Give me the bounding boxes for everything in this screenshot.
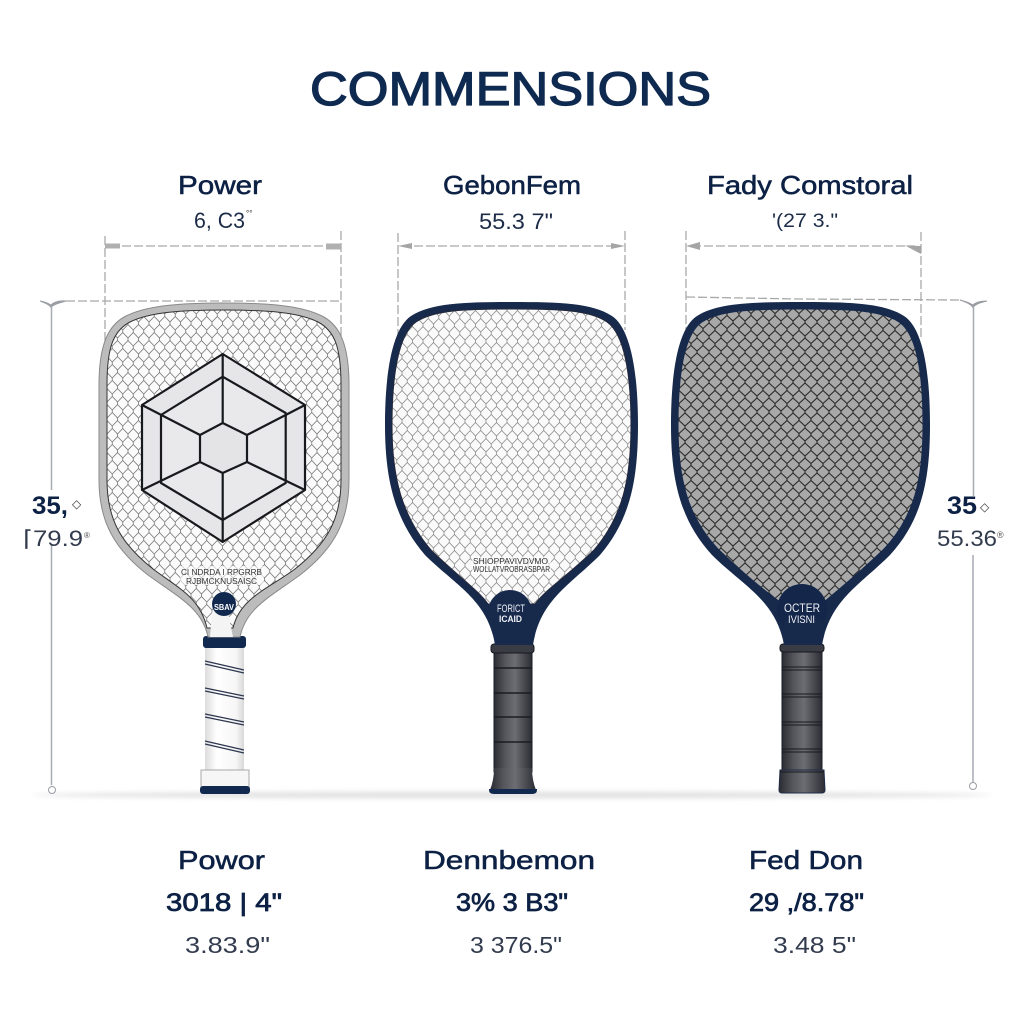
- left height label: ◇: [72, 497, 82, 511]
- dimension lines: paddle 2 width: [398, 231, 625, 335]
- paddle 1 mesh face: [107, 310, 341, 628]
- right height label: 35: [947, 492, 977, 520]
- paddle 1 small text: RJBMCKNUSAISC: [186, 577, 257, 586]
- label: paddle 1 heading: Power: [178, 170, 262, 200]
- height dimension: left: [40, 301, 340, 794]
- left height label: ®: [84, 531, 90, 540]
- paddle 3 badge: OCTER: [784, 601, 820, 615]
- label: paddle 2 heading: [443, 170, 581, 234]
- dimension lines: paddle 3 width: [686, 231, 921, 345]
- bottom specs: paddle 3: 29 ,/8.78": [749, 889, 864, 917]
- label: paddle 2 heading: GebonFem: [443, 170, 581, 200]
- paddle 1 small text: [180, 566, 264, 586]
- paddle 2 badge: [488, 590, 533, 645]
- paddle 3: navy frame with grey mesh: [671, 302, 930, 793]
- right height label: [937, 492, 1004, 551]
- ground shadow: [32, 792, 992, 798]
- label: paddle 1 heading: °°: [246, 209, 252, 218]
- paddle 2 badge: FORICT: [497, 603, 525, 615]
- bottom specs: paddle 1: [166, 845, 282, 958]
- paddle 1 small text: CI NDRDA I RPGRRB: [181, 568, 262, 577]
- right height label: 55.36: [937, 526, 997, 551]
- paddle 3 badge: IVISNI: [788, 614, 815, 626]
- dimension lines: paddle 1 width: [105, 231, 341, 352]
- hexagon emblem: [142, 354, 305, 542]
- label: paddle 1 heading: 6, C3: [194, 208, 245, 233]
- paddle 2 grip: [489, 644, 537, 794]
- bottom specs: paddle 2: 3% 3 B3": [456, 889, 568, 917]
- bottom specs: paddle 2: Dennbemon: [423, 845, 595, 875]
- label: paddle 3 heading: [707, 170, 913, 232]
- paddle 2 frame: [385, 302, 638, 645]
- paddle 1: white handle with hexagon face: [99, 303, 349, 794]
- bottom specs: paddle 3: [749, 845, 864, 958]
- label: paddle 1 heading: [178, 170, 262, 233]
- bottom specs: paddle 1: 3.83.9": [185, 932, 270, 958]
- paddle 2 small text: WOLLATVROBRASBPAR: [473, 565, 550, 574]
- bottom specs: paddle 1: Powor: [178, 845, 265, 875]
- paddle 3 mesh face: [678, 309, 923, 602]
- paddle 1 grip: [200, 636, 250, 794]
- neck insert: [210, 612, 233, 637]
- bottom specs: paddle 3: Fed Don: [749, 845, 863, 875]
- paddle 2 small text: [472, 557, 551, 574]
- paddle 2: navy frame with white mesh: [385, 302, 638, 794]
- paddle 1 frame: [99, 303, 349, 637]
- height dimension: right: [686, 297, 987, 790]
- label: paddle 2 heading: 55.3 7": [479, 209, 553, 234]
- paddle 3 frame: [671, 302, 930, 645]
- paddle 2 mesh face: [392, 309, 631, 604]
- left height label: ⌈79.9: [23, 526, 83, 551]
- left height label: [23, 492, 90, 551]
- paddle 1 badge: [212, 592, 236, 616]
- paddle 3 badge: [777, 584, 827, 645]
- paddle 3 grip: [779, 644, 825, 793]
- right height label: ◇: [980, 500, 990, 514]
- bottom specs: paddle 2: 3 376.5": [470, 932, 562, 958]
- paddle 2 badge: ICAID: [499, 614, 522, 625]
- title: COMMENSIONS: [310, 62, 711, 115]
- paddle 2 small text: SHIOPPAVIVDVMO: [473, 557, 548, 566]
- bottom specs: paddle 1: 3018 | 4": [166, 889, 282, 917]
- bottom specs: paddle 2: [423, 845, 595, 958]
- bottom specs: paddle 3: 3.48 5": [773, 932, 856, 958]
- paddle 1 badge: SBAV: [214, 603, 235, 612]
- left height label: 35,: [32, 492, 68, 520]
- label: paddle 3 heading: Fady Comstoral: [707, 170, 913, 200]
- label: paddle 3 heading: '(27 3.": [772, 211, 838, 232]
- right height label: ®: [997, 530, 1004, 540]
